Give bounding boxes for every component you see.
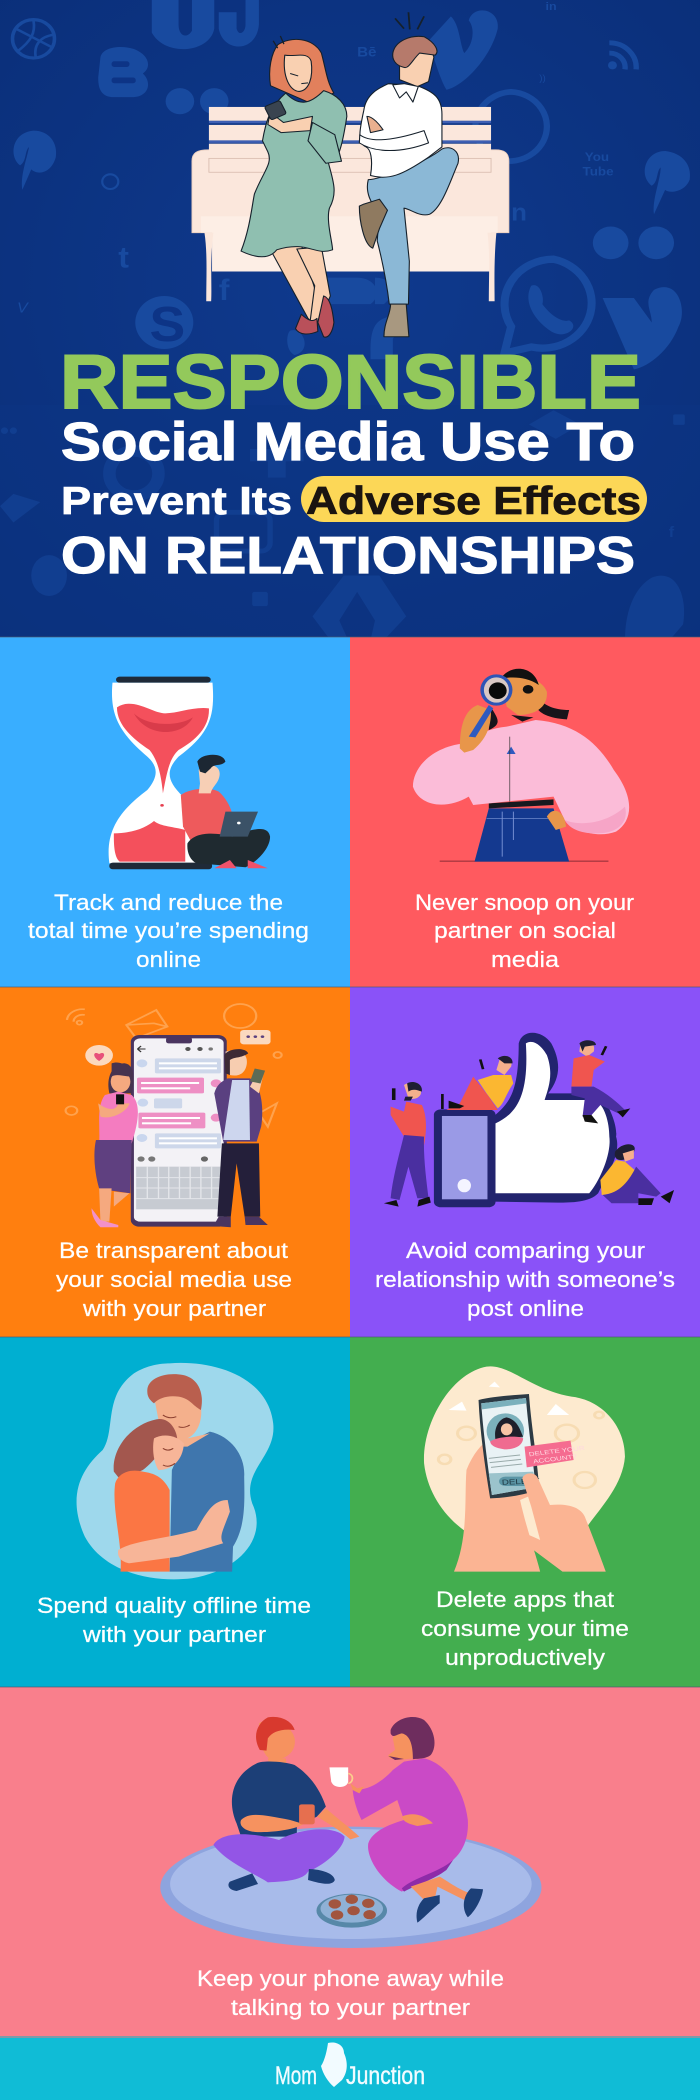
title line: RESPONSIBLE: RESPONSIBLE	[60, 340, 641, 425]
title line: ON RELATIONSHIPS: ON RELATIONSHIPS	[61, 527, 635, 585]
caption: Keep your phone away while	[197, 1966, 504, 1991]
wordmark: Mom	[275, 2062, 317, 2090]
background social media icons: n	[511, 200, 527, 226]
caption: online	[136, 947, 201, 972]
person seated on the cuff	[496, 1056, 512, 1075]
caption: Be transparent about	[59, 1238, 289, 1263]
background social media icons: Bē	[357, 45, 377, 60]
panel: be transparent	[0, 987, 350, 1337]
highlighted phrase: Adverse Effects: Adverse Effects	[306, 480, 641, 523]
illustration: woman with magnifying glass	[413, 669, 629, 862]
background social media icons	[0, 0, 690, 640]
panel: phone away	[0, 1687, 700, 2037]
man	[213, 1717, 359, 1891]
person standing left	[404, 1083, 421, 1099]
woman	[108, 1063, 134, 1093]
caption: talking to your partner	[231, 1995, 471, 2020]
person seated on the thumb	[579, 1041, 594, 1057]
caption: with your partner	[82, 1622, 267, 1647]
illustration: thumbs up with people on phones	[384, 1033, 674, 1207]
caption: Track and reduce the	[54, 890, 283, 915]
row divider lines	[0, 637, 700, 1687]
illustration: hands deleting an account: ACCOUNT?	[533, 1453, 578, 1465]
illustration: hourglass and man with laptop	[109, 677, 270, 869]
speech bubbles	[85, 1045, 113, 1066]
background social media icons: V	[17, 300, 29, 316]
caption: Never snoop on your	[415, 890, 635, 915]
panel: delete apps	[350, 1337, 700, 1687]
wordmark: Junction	[346, 2062, 425, 2090]
caption: total time you’re spending	[28, 918, 309, 943]
panel: track and reduce time online	[0, 637, 350, 987]
background social media icons: You	[585, 150, 609, 164]
title line: Prevent Its: Prevent Its	[61, 480, 292, 523]
footer: MomJunction logo	[0, 2036, 700, 2100]
woman	[350, 1717, 483, 1923]
bench	[192, 107, 509, 301]
icon: mother and child logo mark	[321, 2042, 347, 2087]
panel: never snoop	[350, 637, 700, 987]
woman	[241, 39, 347, 337]
caption: with your partner	[82, 1296, 267, 1321]
caption	[415, 890, 635, 972]
background social media icons: ))	[539, 72, 546, 83]
caption: post online	[467, 1296, 584, 1321]
caption: Avoid comparing your	[406, 1238, 646, 1263]
caption: Spend quality offline time	[37, 1593, 311, 1618]
caption: Delete apps that	[436, 1587, 615, 1612]
title	[60, 340, 647, 585]
background social media icons: f	[669, 524, 675, 541]
panel: header	[0, 0, 700, 640]
man	[225, 1050, 247, 1076]
caption	[28, 890, 309, 972]
caption: consume your time	[421, 1616, 629, 1641]
illustration: hugging couple	[77, 1363, 273, 1579]
wordmark	[275, 2062, 425, 2090]
illustration: hands deleting an account	[424, 1366, 625, 1572]
background social media icons: in	[546, 0, 557, 13]
caption: unproductively	[445, 1645, 606, 1670]
panel: quality offline time	[0, 1337, 350, 1687]
illustration: couple on a bench	[192, 12, 509, 337]
background social media icons: S	[150, 297, 185, 351]
illustration: hands deleting an account: DELETE YOUR	[528, 1445, 585, 1458]
illustration: couple chatting on a rug	[160, 1717, 541, 1948]
background social media icons: f	[219, 273, 230, 307]
caption	[197, 1966, 504, 2020]
illustration: couple with a big phone	[66, 1004, 282, 1227]
caption: partner on social	[434, 918, 616, 943]
illustration: hands deleting an account: DELETE	[501, 1477, 540, 1486]
caption	[375, 1238, 675, 1321]
background social media icons: t	[118, 241, 129, 274]
title line: Social Media Use To: Social Media Use To	[61, 412, 635, 472]
caption	[421, 1587, 629, 1670]
cup	[329, 1767, 352, 1787]
caption	[37, 1593, 311, 1647]
caption: media	[491, 947, 560, 972]
caption	[56, 1238, 292, 1321]
caption: your social media use	[56, 1267, 292, 1292]
caption: relationship with someone’s	[375, 1267, 675, 1292]
person seated right	[615, 1144, 635, 1160]
man	[273, 12, 458, 337]
panel: avoid comparing	[350, 987, 700, 1337]
background social media icons: Tube	[583, 164, 614, 178]
cookie plate	[316, 1894, 387, 1928]
